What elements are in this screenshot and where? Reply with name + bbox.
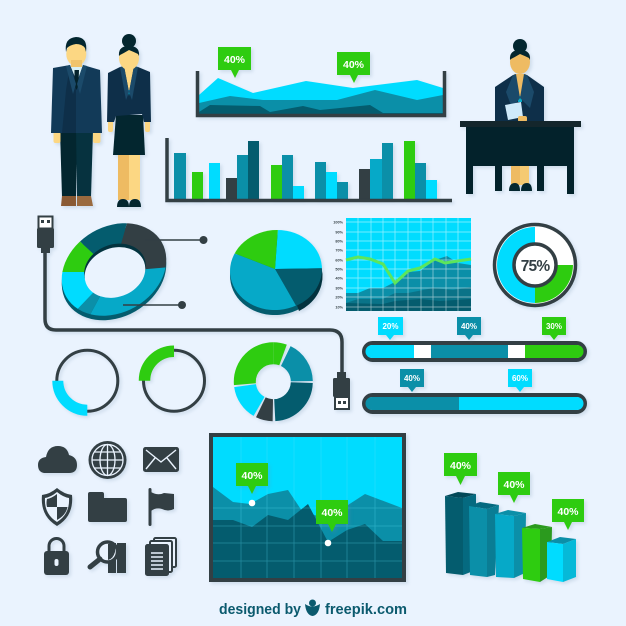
ring chart: green arc [144, 350, 204, 411]
ring chart: 75% [494, 224, 576, 306]
line chart: 50% [335, 268, 344, 272]
donut callout: top [145, 236, 208, 244]
data point marker: right [325, 540, 331, 546]
tag: 60% [508, 369, 532, 392]
figure: businesswoman [107, 34, 151, 207]
icon: padlock [44, 538, 69, 575]
icon: shield [42, 488, 72, 526]
credit: freepik: freepik.com [325, 602, 407, 618]
icon: folder [88, 492, 127, 522]
icon: cloud [38, 446, 77, 473]
line chart: 20% [335, 296, 344, 300]
figure: woman at desk [460, 39, 581, 194]
tag: top area chart right: 40% [343, 59, 365, 71]
ring chart: cyan arc [57, 350, 118, 411]
icon: magnifier [90, 542, 126, 573]
line chart: 90% [335, 230, 344, 234]
tag: 3d bar middle: 40% [503, 479, 525, 491]
3d donut chart [62, 223, 169, 323]
tag: 60%: 60% [512, 374, 528, 383]
line chart [333, 218, 471, 311]
tag: dashboard left: 40% [241, 470, 263, 482]
area chart: top [198, 71, 444, 116]
tag: 30% [542, 317, 566, 340]
tag: dashboard left [236, 463, 268, 494]
tag: 3d bar right [552, 499, 584, 530]
credit: freepik: designed by [219, 602, 301, 618]
icon: flag [148, 488, 174, 526]
segmented donut chart [245, 353, 302, 410]
tag: 20% [378, 317, 403, 340]
tag: top area chart right [337, 52, 370, 83]
line chart: 60% [335, 258, 344, 262]
tag: top area chart left: 40% [224, 54, 246, 66]
tag: 3d bar right: 40% [557, 506, 579, 518]
tag: 40% on first bar [457, 317, 481, 340]
progress bar: two segments [364, 395, 585, 412]
tag: 40% on second bar: 40% [404, 374, 420, 383]
tag: 40% on first bar: 40% [461, 322, 477, 331]
line chart: 10% [335, 306, 344, 310]
line chart: 70% [335, 248, 344, 252]
line chart: 40% [335, 276, 344, 280]
donut callout: bottom [123, 301, 186, 309]
tag: 3d bar left: 40% [450, 460, 472, 472]
usb cable [37, 216, 350, 409]
tag: top area chart left [218, 47, 251, 78]
3d bar chart [445, 492, 576, 582]
icon: globe [88, 441, 126, 479]
tag: 40% on second bar [400, 369, 424, 392]
icon: mail [143, 447, 179, 472]
line chart: 80% [335, 240, 344, 244]
line chart: 100% [333, 220, 344, 224]
tag: 3d bar left [444, 453, 477, 485]
tag: 20%: 20% [382, 322, 399, 331]
line chart: 30% [335, 286, 344, 290]
bar chart [167, 138, 452, 200]
tag: dashboard right [316, 500, 348, 532]
dashboard area chart panel [211, 435, 404, 580]
tag: dashboard right: 40% [321, 507, 343, 519]
tag: 3d bar middle [498, 472, 530, 503]
credit: freepik [219, 600, 407, 618]
ring chart: 75%: 75% [521, 258, 550, 275]
tag: 30%: 30% [546, 322, 562, 331]
3d pie chart [230, 230, 326, 318]
figure: businessman [51, 37, 102, 206]
data point marker: left [249, 500, 255, 506]
progress bar: three segments [364, 343, 585, 360]
icon: documents [146, 538, 176, 575]
